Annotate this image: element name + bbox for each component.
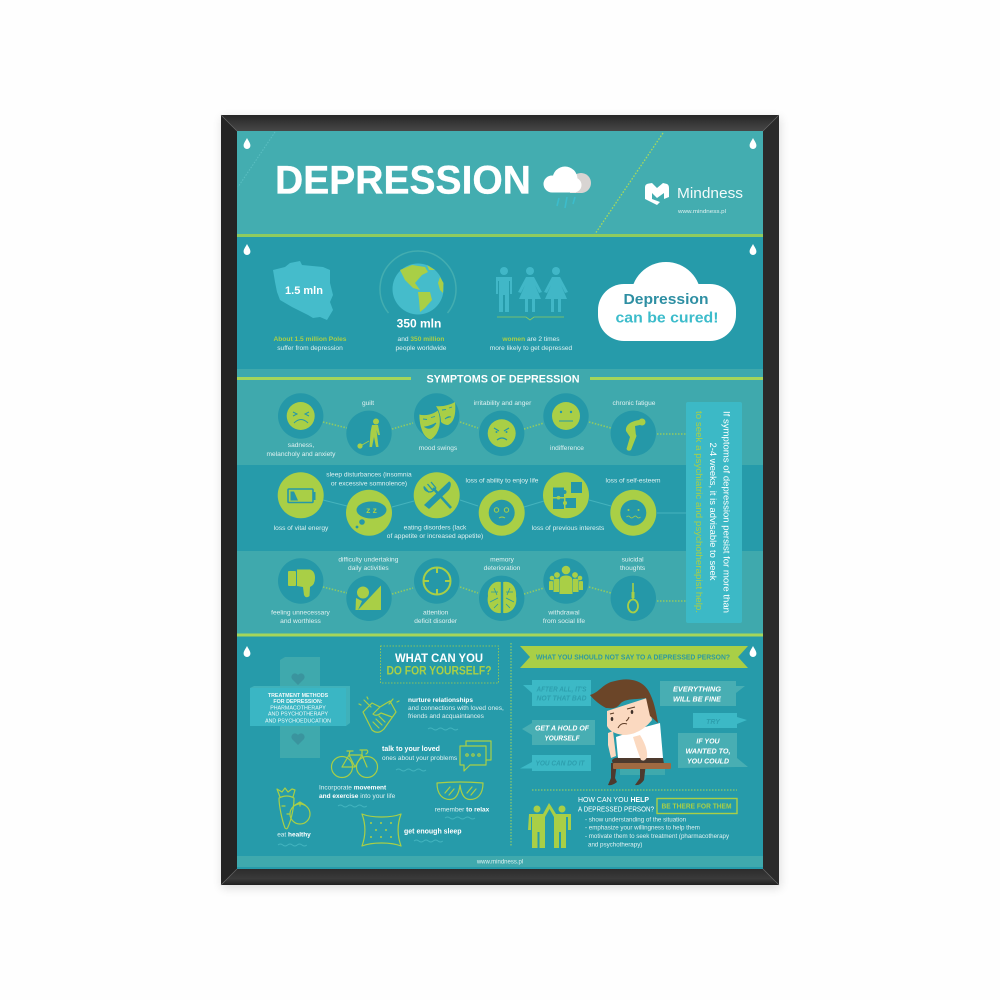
cross: treatment methods [250, 657, 350, 758]
symptom: loss of vital energy: loss of vital energy [274, 525, 329, 532]
icon: high five [528, 803, 571, 848]
item: nurture relationships: friends and acquaintances [408, 713, 485, 720]
symptom: withdrawal from social life: from social life [543, 618, 585, 625]
how can you help: HOW CAN YOU HELP [578, 797, 649, 804]
icons: droplets [244, 138, 756, 657]
frame shadow [222, 118, 780, 888]
speech bubble: try: TRY [706, 719, 721, 726]
symptom: sadness: sadness, [288, 442, 314, 449]
divider band [237, 632, 763, 636]
symptom: indifference: indifference [550, 445, 584, 452]
symptom: difficulty undertaking daily activities: daily activities [348, 565, 389, 572]
item: eat healthy [277, 788, 311, 846]
symptom: irritability and anger: irritability and anger [474, 400, 532, 407]
symptom: loss of previous interests [532, 472, 605, 532]
how can you help: BE THERE FOR THEM [662, 804, 732, 810]
stat: Poland map: 1.5 mln [285, 285, 323, 297]
ribbon heading: WHAT YOU SHOULD NOT SAY TO A DEPRESSED PERSON? [536, 652, 730, 662]
heading box: DO FOR YOURSELF? [386, 666, 492, 678]
symptom: guilt: guilt [362, 400, 374, 407]
symptom: attention deficit disorder: attention [423, 610, 449, 616]
symptom: sleep disturbances [326, 472, 412, 536]
panel: what you should not say [520, 646, 748, 848]
symptom: attention deficit disorder [414, 558, 459, 625]
callout: seek help [686, 402, 742, 623]
symptom: mood swings [414, 393, 459, 452]
cross: treatment methods: AND PSYCHOTHERAPY [268, 712, 328, 718]
stat: globe: and 350 million [398, 336, 444, 343]
heading: SYMPTOMS OF DEPRESSION [426, 374, 580, 386]
item: remember to relax: remember to relax [435, 806, 490, 814]
symptom: suicidal thoughts [611, 556, 656, 621]
symptom: sadness: melancholy and anxiety [267, 451, 336, 458]
speech bubble: everything will be fine: WILL BE FINE [673, 696, 721, 704]
vertical dotted divider [510, 643, 512, 847]
symptom: sleep disturbances: or excessive somnolence) [331, 480, 407, 487]
symptom: chronic fatigue: chronic fatigue [613, 400, 656, 407]
title: DEPRESSION [275, 158, 531, 202]
dotted separator [532, 789, 737, 791]
symptom: feeling unnecessary: and worthless [280, 618, 322, 625]
symptom: irritability and anger [474, 400, 532, 456]
symptom: loss of vital energy [274, 472, 329, 532]
item: movement and exercise: and exercise into your life [319, 793, 396, 800]
heading box: WHAT CAN YOU [395, 653, 483, 665]
symptom: memory deterioration: deterioration [484, 565, 521, 572]
how can you help: - motivate them to seek treatment (pharmacotherapy [585, 833, 730, 840]
callout: Depression can be cured: Depression [624, 291, 708, 308]
symptom: memory deterioration [479, 556, 524, 621]
speech bubble: you can do it: YOU CAN DO IT [536, 760, 585, 768]
stat: women figures: more likely to get depressed [490, 345, 573, 352]
speech bubble: if you wanted to: WANTED TO, [686, 748, 731, 756]
stat: Poland map: suffer from depression [277, 345, 343, 352]
callout: Depression can be cured: can be cured! [616, 310, 718, 326]
symptom: difficulty undertaking daily activities: difficulty undertaking [338, 556, 399, 564]
stat: globe: people worldwide [396, 345, 447, 352]
cross: treatment methods: AND PSYCHOEDUCATION [265, 718, 331, 724]
symptom: loss of ability to enjoy life: loss of ability to enjoy life [466, 478, 539, 484]
symptom: mood swings: mood swings [419, 445, 458, 452]
symptom: memory deterioration: memory [490, 556, 515, 564]
item: nurture relationships: and connections with loved ones, [408, 705, 504, 712]
poster background [237, 131, 763, 869]
speech bubble: you can do it [520, 755, 591, 771]
logo: Mindness: Mindness [677, 185, 743, 202]
heading box [380, 646, 498, 683]
symptom: withdrawal from social life [543, 558, 589, 625]
how can you help: A DEPRESSED PERSON? [578, 806, 654, 814]
cross: treatment methods: FOR DEPRESSION: [273, 699, 323, 705]
how can you help: - emphasize your willingness to help them [585, 824, 700, 832]
cross: treatment methods: PHARMACOTHERAPY [270, 705, 326, 711]
poster frame [221, 115, 779, 885]
symptom: chronic fatigue [611, 400, 656, 456]
symptom: feeling unnecessary: feeling unnecessary [271, 610, 331, 616]
speech bubble: if you wanted to: IF YOU [696, 738, 721, 746]
symptom: eating disorders: eating disorders (lack [404, 524, 467, 532]
callout: seek help: to seek a psychiatric and psychotherapist help. [694, 411, 705, 613]
symptom: sadness [267, 393, 336, 458]
illustration: sad man [590, 679, 671, 785]
speech bubble: everything will be fine [660, 681, 745, 706]
item: movement and exercise: Incorporate movement [319, 784, 387, 792]
item: talk to your loved ones [382, 741, 491, 771]
stat: globe: 350 mln [397, 316, 441, 330]
speech bubble: after all: NOT THAT BAD [536, 696, 586, 702]
stat: women figures [490, 267, 573, 352]
speech bubble: try [693, 713, 747, 728]
stat: globe [380, 251, 456, 352]
symptom: indifference [543, 393, 589, 452]
symptom: attention deficit disorder: deficit disorder [414, 618, 458, 625]
symptom: guilt [346, 400, 392, 456]
speech bubble: if you wanted to: YOU COULD [687, 758, 729, 766]
panel: what can you do for yourself [250, 646, 504, 846]
cross: treatment methods: TREATMENT METHODS [268, 693, 329, 699]
stat: women figures: women are 2 times [501, 336, 560, 343]
item: remember to relax [435, 782, 490, 819]
speech bubble: get a hold: GET A HOLD OF [535, 726, 590, 732]
speech bubble: get a hold: YOURSELF [544, 736, 580, 742]
symptom: loss of previous interests: loss of previous interests [532, 525, 605, 532]
item: talk to your loved ones: ones about your problems [382, 755, 458, 762]
footer: www.mindness.pl [476, 860, 523, 866]
how can you help: - show understanding of the situation [585, 816, 687, 824]
item: movement and exercise [319, 750, 396, 807]
connector lines [323, 422, 686, 601]
symptom: sleep disturbances: z z [366, 505, 377, 515]
logo: Mindness: www.mindness.pl [677, 209, 726, 215]
icon: rain cloud [544, 166, 591, 208]
symptom: eating disorders: of appetite or increased appetite) [387, 533, 483, 540]
logo: Mindness [645, 183, 743, 215]
speech bubble: get a hold [522, 720, 595, 745]
speech bubble: everything will be fine: EVERYTHING [673, 686, 722, 694]
symptom: suicidal thoughts: thoughts [620, 565, 646, 572]
symptom: loss of self-esteem: loss of self-esteem [606, 478, 661, 484]
how can you help: and psychotherapy) [588, 842, 642, 848]
symptom: withdrawal from social life: withdrawal [547, 610, 580, 616]
symptom: difficulty undertaking daily activities [338, 556, 399, 621]
speech bubble: if you wanted to [678, 733, 748, 768]
footer [237, 856, 763, 869]
item: talk to your loved ones: talk to your loved [382, 746, 440, 753]
symptom: feeling unnecessary [271, 558, 331, 625]
symptom: sleep disturbances: sleep disturbances (insomnia [326, 472, 412, 478]
item: get enough sleep: get enough sleep [404, 828, 462, 836]
item: nurture relationships [359, 697, 504, 732]
header panel [237, 131, 763, 237]
ribbon heading [520, 646, 748, 668]
symptom: loss of ability to enjoy life [466, 478, 539, 536]
symptom: suicidal thoughts: suicidal [622, 556, 644, 564]
callout: seek help: If symptoms of depression persist for more than [722, 411, 732, 613]
symptom: loss of self-esteem [606, 478, 661, 536]
item: get enough sleep [362, 814, 462, 846]
speech bubble: after all [523, 680, 591, 706]
callout: Depression can be cured [598, 262, 736, 341]
item: nurture relationships: nurture relationships [408, 697, 473, 704]
callout: seek help: 2-4 weeks, it is advisable to seek [708, 442, 719, 581]
stat: Poland map [273, 261, 347, 352]
speech bubble: after all: AFTER ALL, IT'S [536, 686, 587, 694]
panel: statistics [273, 251, 736, 352]
panel: symptoms of depression [237, 369, 763, 632]
item: eat healthy: eat healthy [277, 832, 311, 838]
how can you help [578, 797, 737, 848]
stat: Poland map: About 1.5 million Poles [274, 336, 347, 343]
symptom: eating disorders [387, 472, 483, 540]
